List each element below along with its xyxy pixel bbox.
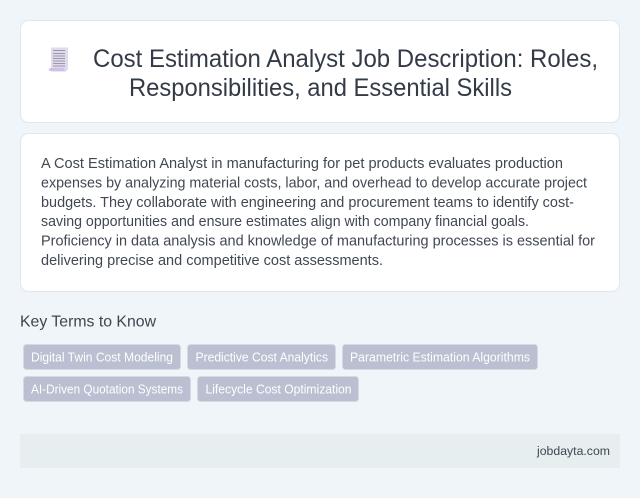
text block: description: expenses by analyzing material costs, labor, and overhead to develop accurate project [41,176,587,192]
icon: document receipt [48,48,68,72]
tag: lifecycle: Lifecycle Cost Optimization [206,382,352,396]
heading: Cost Estimation Analyst Job Description: Roles, [93,45,598,73]
heading [93,45,598,102]
tag: digital twin: Digital Twin Cost Modeling [31,350,173,364]
tag: lifecycle [198,376,358,402]
heading: Responsibilities, and Essential Skills [129,74,512,102]
text block: description: saving opportunities and ensure estimates align with company financial goals. [41,214,529,230]
tags: key terms [24,344,538,402]
panel: title card [20,20,620,122]
tag: predictive [188,344,336,370]
text block: description: Proficiency in data analysis and knowledge of manufacturing processes is essential for [41,234,595,250]
text block: description: budgets. They collaborate with engineering and procurement teams to identify cost- [41,195,574,211]
text block: description: A Cost Estimation Analyst in manufacturing for pet products evaluates production [41,156,563,172]
footer source: jobdayta.com [536,444,610,458]
tag: parametric: Parametric Estimation Algorithms [350,350,530,364]
text block: description [41,156,595,269]
tag: predictive: Predictive Cost Analytics [196,350,328,364]
footer bar [20,434,620,468]
tag: parametric [342,344,538,370]
panel: description card [20,134,620,292]
tag: ai-driven: AI-Driven Quotation Systems [31,382,183,396]
text block: description: delivering precise and competitive cost assessments. [41,253,383,269]
tag: digital twin [24,344,180,370]
heading: key terms: Key Terms to Know [20,314,156,330]
tag: ai-driven [24,376,190,402]
